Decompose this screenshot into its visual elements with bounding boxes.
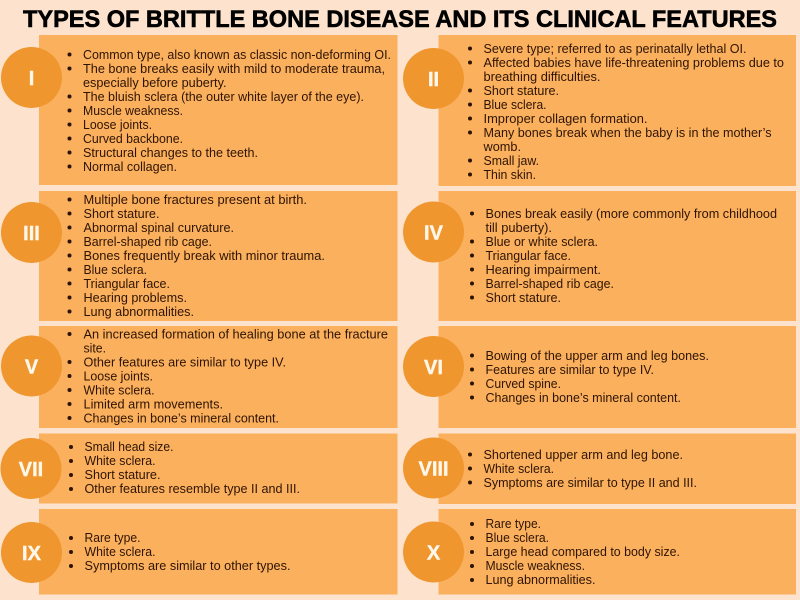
bullet list: type II features: Blue sclera. (484, 98, 546, 112)
bullet list: type I features: especially before puberty. (83, 76, 227, 90)
bullet list: type I features: The bone breaks easily with mild to moderate trauma, (83, 62, 385, 76)
bullet list: type III features: Blue sclera. (84, 263, 147, 277)
bullet list: type III features: Hearing problems. (84, 291, 187, 305)
badge: type III: III (23, 223, 40, 245)
bullet list: type I features (68, 48, 391, 174)
bullet list: type IV features: till puberty). (486, 221, 552, 235)
bullet list: type II features: womb. (482, 140, 521, 154)
bullet list: type IV features: Triangular face. (486, 249, 571, 263)
bullet list: type IV features: Barrel-shaped rib cage. (486, 277, 614, 291)
panel: type IX (1, 509, 398, 594)
bullet list: type I features: The bluish sclera (the outer white layer of the eye). (83, 90, 364, 104)
bullet list: type IV features: Blue or white sclera. (486, 235, 598, 249)
bullet list: type II features (468, 42, 784, 182)
badge: type VIII: VIII (418, 458, 449, 480)
panel: type I (1, 35, 398, 185)
badge: type VI (403, 336, 464, 397)
bullet list: type II features: Many bones break when the baby is in the mother’s (484, 126, 772, 140)
bullet list: type II features: Severe type; referred to as perinatally lethal OI. (484, 42, 746, 56)
bullet list: type V features: Other features are similar to type IV. (84, 356, 286, 370)
panel: type VIII (403, 434, 796, 504)
bullet list: type III features: Lung abnormalities. (84, 305, 194, 319)
badge: type VII: VII (19, 459, 43, 481)
badge: type VI: VI (424, 357, 443, 379)
title: TYPES OF BRITTLE BONE DISEASE AND ITS CLINICAL FEATURES (23, 6, 777, 33)
bullet list: type I features: Loose joints. (83, 118, 152, 132)
panel: type II (403, 35, 796, 186)
bullet list: type VIII features: White sclera. (484, 462, 554, 476)
panel: type X (403, 509, 796, 594)
badge: type VIII (403, 438, 464, 498)
panel: type III (1, 191, 398, 321)
panel: type V (1, 326, 398, 428)
bullet list: type III features (68, 193, 325, 319)
bullet list: type V features (68, 328, 388, 426)
bullet list: type X features: Muscle weakness. (486, 559, 585, 573)
bullet list: type VII features: White sclera. (84, 454, 156, 468)
bullet list: type VI features: Features are similar to type IV. (486, 363, 654, 377)
bullet list: type I features: Curved backbone. (83, 132, 183, 146)
bullet list: type VIII features: Symptoms are similar to type II and III. (484, 476, 697, 490)
bullet list: type II features: Short stature. (484, 84, 559, 98)
bullet list: type VII features: Other features resemble type II and III. (84, 482, 300, 496)
bullet list: type IV features: Hearing impairment. (486, 263, 601, 277)
badge: type IX (1, 522, 62, 583)
badge: type I (1, 47, 62, 108)
panel: type VI (403, 326, 796, 428)
bullet list: type VIII features: Shortened upper arm and leg bone. (484, 448, 683, 462)
bullet list: type III features: Triangular face. (84, 277, 170, 291)
bullet list: type I features: Muscle weakness. (83, 104, 183, 118)
bullet list: type IV features: Bones break easily (more commonly from childhood (486, 207, 777, 221)
bullet list: type V features: site. (84, 342, 106, 356)
bullet list: type III features: Abnormal spinal curvature. (84, 221, 234, 235)
bullet list: type II features: Small jaw. (484, 154, 539, 168)
bullet list: type II features: Thin skin. (484, 168, 536, 182)
bullet list: type II features: Improper collagen formation. (484, 112, 648, 126)
bullet list: type I features: Common type, also known as classic non-deforming OI. (83, 48, 391, 62)
bullet list: type VI features: Changes in bone’s mineral content. (486, 391, 681, 405)
bullet list: type III features: Barrel-shaped rib cage. (84, 235, 212, 249)
badge: type III (1, 202, 62, 263)
bullet list: type IX features (69, 531, 290, 573)
bullet list: type II features: Affected babies have life-threatening problems due to (484, 56, 784, 70)
bullet list: type X features: Large head compared to body size. (486, 545, 680, 559)
bullet list: type X features: Blue sclera. (486, 531, 549, 545)
bullet list: type III features: Short stature. (84, 207, 160, 221)
bullet list: type VII features: Small head size. (84, 440, 174, 454)
badge: type IV: IV (424, 222, 444, 244)
bullet list: type VI features (470, 349, 709, 405)
bullet list: type VII features: Short stature. (84, 468, 160, 482)
badge: type IV (403, 202, 464, 262)
badge: type II: II (428, 69, 439, 91)
bullet list: type V features: Changes in bone’s mineral content. (84, 412, 279, 426)
panel: type IV (403, 191, 796, 321)
badge: type X (403, 522, 464, 582)
bullet list: type III features: Multiple bone fractures present at birth. (84, 193, 307, 207)
bullet list: type V features: Loose joints. (84, 370, 153, 384)
bullet list: type V features: Limited arm movements. (84, 398, 223, 412)
badge: type IX: IX (22, 543, 42, 565)
bullet list: type III features: Bones frequently break with minor trauma. (84, 249, 325, 263)
bullet list: type IX features: White sclera. (84, 545, 156, 559)
bullet list: type VI features: Bowing of the upper arm and leg bones. (486, 349, 709, 363)
bullet list: type II features: breathing difficulties. (484, 70, 600, 84)
bullet list: type V features: An increased formation of healing bone at the fracture (84, 328, 388, 342)
bullet list: type VIII features (468, 448, 697, 490)
bullet list: type VI features: Curved spine. (486, 377, 561, 391)
badge: type II (403, 48, 464, 109)
bullet list: type I features: Structural changes to the teeth. (83, 146, 258, 160)
bullet list: type X features: Lung abnormalities. (486, 573, 596, 587)
bullet list: type IX features: Symptoms are similar to other types. (84, 559, 290, 573)
badge: type X: X (427, 542, 441, 564)
bullet list: type X features (470, 517, 680, 587)
bullet list: type IV features (470, 207, 777, 305)
panel: type VII (0, 434, 398, 504)
bullet list: type X features: Rare type. (486, 517, 541, 531)
bullet list: type IV features: Short stature. (486, 291, 561, 305)
bullet list: type VII features (69, 440, 300, 496)
bullet list: type V features: White sclera. (84, 384, 154, 398)
bullet list: type IX features: Rare type. (84, 531, 140, 545)
badge: type V (1, 336, 62, 396)
badge: type VII (0, 438, 62, 499)
badge: type V: V (25, 356, 39, 378)
bullet list: type I features: Normal collagen. (83, 160, 177, 174)
badge: type I: I (29, 68, 34, 90)
